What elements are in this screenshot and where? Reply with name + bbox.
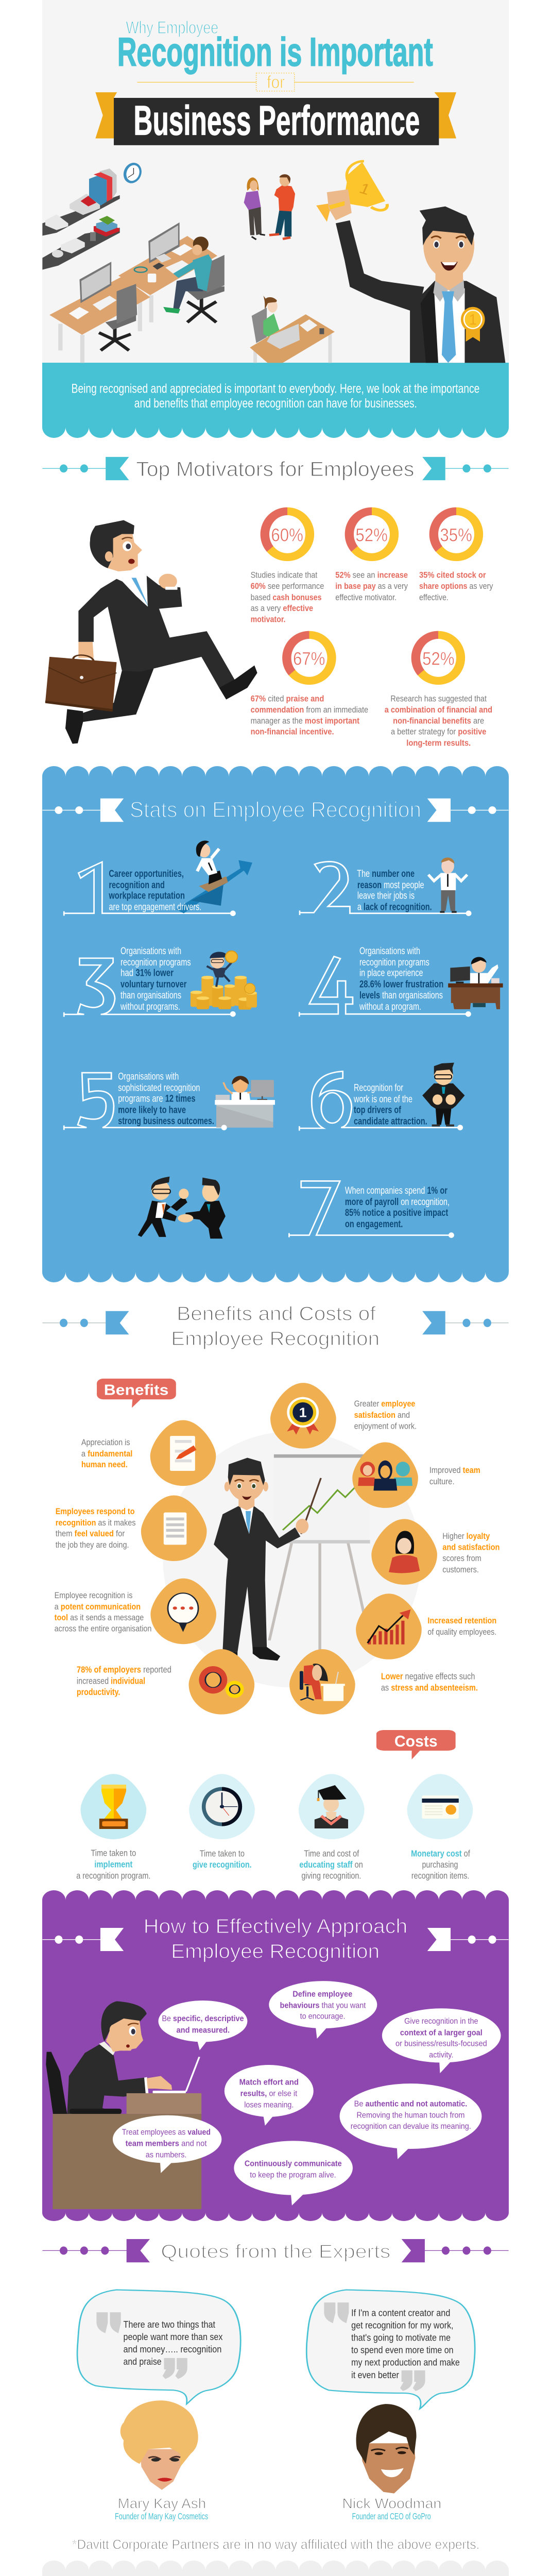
stat 1 <box>64 841 252 916</box>
number 6 <box>299 1071 460 1131</box>
callout: continuously communicate: to keep the program alive. <box>250 2171 336 2180</box>
stat 5 <box>64 1071 275 1130</box>
icon: closing quote <box>400 2370 425 2391</box>
callout: match effort <box>225 2065 314 2126</box>
callout: define behaviours: to encourage. <box>300 2012 346 2021</box>
number 2 <box>300 861 469 915</box>
text 6: candidate attraction. <box>354 1116 427 1127</box>
quote bubble: Mary Kay Ash <box>77 2290 240 2404</box>
callout: treat employees <box>113 2115 221 2173</box>
name: Nick Woodman: Founder and CEO of GoPro <box>352 2512 431 2522</box>
illustration: thumbs-up man <box>422 1063 464 1126</box>
callout: context of larger goal <box>382 2008 501 2073</box>
text: the job they are doing. <box>56 1540 129 1550</box>
text 7: more of payroll on recognition, <box>345 1196 450 1208</box>
quote bubble: Nick Woodman <box>306 2290 475 2409</box>
section: benefits lower and costs: Time taken to <box>200 1849 245 1858</box>
section: how to approach <box>42 1914 509 2209</box>
illustration: standing man <box>269 174 295 239</box>
benefit: productivity <box>77 1649 254 1715</box>
portrait: Nick Woodman <box>356 2404 417 2494</box>
text: Higher loyalty <box>442 1532 490 1541</box>
heading: benefits and costs <box>42 1302 509 1350</box>
heading: stats on employee recognition <box>42 798 509 822</box>
text 2: The number one <box>357 868 415 879</box>
icon: wall clock <box>122 161 144 184</box>
illustration: businessman raising trophy: 1 <box>469 311 477 328</box>
chart: donut 52%: 52% <box>355 525 388 546</box>
text: a fundamental <box>81 1449 132 1459</box>
illustration: running businessman <box>45 520 257 744</box>
quote text: If I'm a content creator and <box>351 2308 450 2318</box>
text: 35% stock options: 35% cited stock or <box>419 570 486 580</box>
benefit: satisfaction <box>270 1383 417 1449</box>
text: 52% research: a better strategy for positive <box>391 726 486 736</box>
quote text: and praise <box>124 2357 162 2367</box>
quote text: to spend even more time on <box>351 2345 454 2355</box>
text: Employees respond to <box>56 1507 134 1516</box>
text 4 <box>359 945 443 1012</box>
name: Nick Woodman: Nick Woodman <box>342 2496 441 2512</box>
panel: header background <box>42 0 509 363</box>
chart: donut 52% research: 52% <box>422 649 455 669</box>
quote text: that's going to motivate me <box>351 2332 451 2343</box>
stat 6 <box>299 1063 464 1131</box>
number 5 <box>64 1073 225 1130</box>
quote text: it even better <box>351 2369 399 2380</box>
title <box>117 18 433 92</box>
callout: match effort: loses meaning. <box>244 2100 294 2109</box>
callout: be specific: and measured. <box>176 2026 230 2035</box>
illustration: man at desk <box>448 957 503 1009</box>
callout: be authentic: recognition can devalue its meaning. <box>351 2122 471 2131</box>
text: Appreciation is <box>81 1438 130 1447</box>
text 7: When companies spend 1% or <box>345 1185 447 1196</box>
intro text <box>72 381 479 410</box>
callout: continuously communicate <box>234 2141 353 2206</box>
text: Employee recognition is <box>55 1591 132 1600</box>
text: 60% bonuses: based cash bonuses <box>251 592 322 602</box>
text 3: than organisations <box>120 990 181 1001</box>
benefit: communication <box>55 1579 216 1644</box>
background circle <box>163 1431 421 1687</box>
illustration: office chair front <box>99 284 137 350</box>
section: quotes and footer <box>42 2239 509 2576</box>
section: benefits lower and costs <box>76 1649 478 1880</box>
chart: donut 52% research <box>411 631 465 685</box>
text 4: recognition programs <box>359 957 429 968</box>
callout: be authentic: Be authentic and not automatic. <box>354 2099 467 2108</box>
illustration: businessman raising trophy <box>336 207 505 363</box>
illustration: standing woman <box>244 177 265 240</box>
icon: closing quote <box>163 2358 187 2379</box>
text 4: in place experience <box>359 968 423 979</box>
icon: medal <box>270 1383 336 1449</box>
text 7: 85% notice a positive impact <box>345 1207 449 1218</box>
text 1: Career opportunities, <box>109 868 184 879</box>
illustration: trophy in hand: 1 <box>357 179 373 198</box>
benefit: lower stress <box>289 1649 478 1715</box>
text <box>55 1591 151 1634</box>
stat 4 <box>299 945 503 1017</box>
illustration: presenter <box>214 1458 321 1660</box>
text: 67% praise: commendation from an immediate <box>251 705 368 715</box>
illustration: woman at laptop desk <box>250 296 335 363</box>
icon: trophy <box>80 1774 146 1839</box>
text: 67% praise: manager as the most important <box>251 716 359 725</box>
text: 52% base pay: effective motivator. <box>335 592 397 602</box>
text 6: top drivers of <box>354 1105 401 1115</box>
text: 60% bonuses: 60% see performance <box>251 581 324 591</box>
text <box>76 1848 150 1880</box>
text: a potent communication <box>55 1602 141 1612</box>
chart: donut 60% <box>261 507 314 561</box>
illustration: person on arrow <box>176 841 252 913</box>
text: productivity. <box>77 1687 120 1697</box>
chart: donut 52% <box>345 507 399 561</box>
heading: benefits and costs: Benefits and Costs of <box>177 1302 376 1325</box>
text: enjoyment of work. <box>354 1421 417 1431</box>
icon: opening quote <box>324 2302 349 2323</box>
text 3: without programs. <box>120 1001 180 1012</box>
callout: match effort: results, or else it <box>240 2089 297 2098</box>
text 1: workplace reputation <box>109 890 185 902</box>
icon: team <box>352 1442 418 1508</box>
text: 67% praise: non-financial incentive. <box>251 726 334 736</box>
number 1 <box>64 862 233 916</box>
text 2: a lack of recognition. <box>357 902 432 913</box>
icon: rising chart <box>356 1594 422 1659</box>
text: 60% bonuses <box>251 570 324 624</box>
text: 52% base pay: in base pay as a very <box>335 581 408 591</box>
text: implement <box>94 1859 132 1869</box>
text 2: leave their jobs is <box>357 890 415 902</box>
text: 52% base pay: 52% see an increase <box>335 570 408 580</box>
stat 3 <box>64 945 257 1017</box>
callout: treat employees: Treat employees as valued <box>122 2128 211 2137</box>
callout: context of larger goal: context of a larger goal <box>400 2028 483 2037</box>
benefit: team culture <box>352 1442 480 1508</box>
callout: costs: Costs <box>394 1732 438 1750</box>
section: header <box>42 18 505 410</box>
text: customers. <box>442 1565 479 1574</box>
quote text: my next production and make <box>351 2357 460 2368</box>
panel: references grey background <box>42 2561 509 2576</box>
text: 35% stock options: share options as very <box>419 581 493 591</box>
text 5: strong business outcomes. <box>118 1115 214 1127</box>
callout: define behaviours <box>269 1981 377 2039</box>
text <box>427 1616 496 1637</box>
illustration: handshake <box>138 1177 226 1239</box>
name: Mary Kay Ash <box>115 2496 208 2522</box>
callout: define behaviours: behaviours that you want <box>280 2001 366 2010</box>
heading: how to effectively approach: Employee Recognition <box>171 1940 380 1962</box>
text <box>381 1671 478 1692</box>
heading: quotes from the experts: Quotes from the Experts <box>161 2241 390 2262</box>
text: 67% praise <box>251 693 368 736</box>
text: 52% research: non-financial benefits are <box>393 716 484 725</box>
quote text: and money….. recognition <box>124 2344 221 2354</box>
illustration: shrugging man <box>428 858 467 912</box>
section: stats <box>42 798 509 1239</box>
illustration: flip chart <box>269 1454 370 1650</box>
chart: donut 35%: 35% <box>440 525 472 546</box>
text: 52% research: long-term results. <box>406 738 471 748</box>
text: increased individual <box>77 1676 145 1686</box>
stat 2 <box>300 858 472 916</box>
icon: opening quote <box>96 2312 121 2333</box>
shelves with binders and books <box>42 168 120 269</box>
text: tool as it sends a message <box>55 1613 144 1622</box>
quote text <box>124 2319 223 2367</box>
text 1: recognition and <box>109 879 165 891</box>
text: of quality employees. <box>427 1628 496 1637</box>
heading: stats on employee recognition: Stats on Employee Recognition <box>130 798 421 822</box>
chart: donut 60%: 60% <box>271 525 303 546</box>
text: purchasing <box>422 1860 458 1870</box>
illustration: happy worker at grey desk <box>215 1076 275 1128</box>
section: benefits lower and costs: Monetary cost of <box>411 1849 470 1858</box>
text 5: Organisations with <box>118 1071 179 1082</box>
text <box>77 1665 171 1697</box>
illustration: coins and man <box>191 951 257 1010</box>
text: 60% bonuses: as a very effective <box>251 603 313 613</box>
text: Improved team <box>429 1466 480 1475</box>
callout: context of larger goal: or business/results-focused <box>395 2039 487 2048</box>
callout: context of larger goal: Give recognition in the <box>404 2016 478 2026</box>
portrait: Mary Kay Ash <box>120 2400 198 2490</box>
text 2 <box>357 868 432 913</box>
name: Mary Kay Ash: Mary Kay Ash <box>118 2496 206 2512</box>
benefit: loyalty <box>371 1519 500 1585</box>
text <box>354 1399 417 1431</box>
text 4: levels than organisations <box>359 990 443 1001</box>
text 5 <box>118 1071 214 1127</box>
name: Nick Woodman <box>342 2496 441 2522</box>
text: human need. <box>81 1460 128 1469</box>
text 1: are top engagement drivers. <box>109 902 201 913</box>
text: 52% base pay <box>335 570 408 602</box>
title: Why Employee <box>126 18 218 38</box>
text 5: more likely to have <box>118 1105 186 1115</box>
icon: gears <box>188 1649 254 1715</box>
callout: treat employees: as numbers. <box>146 2150 186 2159</box>
text 7: on engagement. <box>345 1218 403 1230</box>
callout: benefits <box>97 1379 176 1408</box>
title: for <box>267 73 285 92</box>
text: culture. <box>429 1477 455 1486</box>
text: 60% bonuses: Studies indicate that <box>251 570 318 580</box>
text: recognition as it makes <box>56 1518 136 1528</box>
cost: educating staff <box>299 1774 365 1880</box>
text <box>299 1849 363 1880</box>
text 2: reason most people <box>357 879 424 891</box>
illustration: man at laptop and desk <box>46 2001 201 2209</box>
benefit: retention <box>356 1594 496 1659</box>
text 3: voluntary turnover <box>120 979 187 990</box>
icon: customer <box>371 1519 437 1585</box>
text 6: Recognition for <box>354 1082 403 1094</box>
panel: approach purple background <box>42 1890 509 2221</box>
heading: quotes from the experts <box>42 2239 509 2262</box>
icon: notepad <box>141 1495 206 1561</box>
text 6: work is one of the <box>353 1094 412 1105</box>
text <box>193 1849 252 1870</box>
panel: stats blue background <box>42 766 509 1282</box>
text 4: Organisations with <box>359 945 420 957</box>
cost: implement <box>76 1774 150 1880</box>
chart: donut 35% <box>429 507 483 561</box>
heading: how to effectively approach: How to Effectively Approach <box>144 1914 407 1937</box>
section: benefits lower and costs: educating staff on <box>299 1860 363 1870</box>
number 3 <box>64 958 233 1017</box>
text: 35% stock options: effective. <box>419 592 449 602</box>
text: 78% of employers reported <box>77 1665 171 1674</box>
text <box>81 1438 132 1469</box>
name: Mary Kay Ash: Founder of Mary Kay Cosmetics <box>115 2512 208 2522</box>
text 3: recognition programs <box>120 957 191 968</box>
chart: donut 67%: 67% <box>293 649 325 669</box>
chart: donut 67% <box>282 631 336 685</box>
icon: clock <box>189 1774 255 1839</box>
cost: time <box>189 1774 255 1870</box>
text 6 <box>353 1082 427 1127</box>
text: Increased retention <box>427 1616 496 1625</box>
heading: how to effectively approach <box>42 1914 509 1962</box>
text: them feel valued for <box>56 1529 125 1538</box>
callout: continuously communicate: Continuously communicate <box>245 2159 342 2168</box>
callout: treat employees: team members and not <box>126 2139 207 2148</box>
text: 52% research <box>385 693 492 748</box>
text <box>429 1466 480 1486</box>
illustration: trophy in hand <box>316 161 387 222</box>
section: benefits lower and costs: a recognition program. <box>76 1871 150 1880</box>
icon: speech bubble <box>150 1579 216 1644</box>
callout: be specific: Be specific, descriptive <box>162 2014 244 2023</box>
text: 60% bonuses: motivator. <box>251 614 286 624</box>
callout: costs <box>376 1730 456 1759</box>
section: benefits lower and costs: Time and cost of <box>304 1849 359 1858</box>
icon: document with pencil <box>150 1420 216 1486</box>
callout: be specific <box>158 2001 247 2050</box>
text: scores from <box>442 1554 481 1563</box>
cost: monetary <box>407 1774 473 1880</box>
icon: stressed worker at desk <box>289 1649 355 1715</box>
text <box>411 1849 470 1880</box>
text 5: sophisticated recognition <box>118 1082 200 1094</box>
quote text: get recognition for my work, <box>351 2320 454 2331</box>
text 4: without a program. <box>359 1001 421 1012</box>
text: across the entire organisation <box>55 1624 151 1634</box>
callout: match effort: Match effort and <box>239 2078 299 2087</box>
icon: graduate <box>299 1774 365 1839</box>
callout: be authentic <box>340 2083 481 2159</box>
text 3: had 31% lower <box>120 968 174 979</box>
text 5: programs are 12 times <box>118 1093 196 1104</box>
illustration: office desks <box>49 223 217 363</box>
text 4: 28.6% lower frustration <box>359 979 443 990</box>
text: and satisfaction <box>442 1543 500 1552</box>
text <box>56 1507 136 1550</box>
callout: benefits: Benefits <box>104 1382 168 1398</box>
benefit: feel valued <box>56 1495 206 1561</box>
quote text <box>351 2308 460 2380</box>
text: satisfaction and <box>354 1411 410 1420</box>
section: benefits lower and costs: give recognition. <box>193 1860 252 1870</box>
quote text: people want more than sex <box>124 2332 223 2342</box>
text: 67% praise: 67% cited praise and <box>251 693 324 703</box>
text 3: Organisations with <box>120 945 181 957</box>
quote text: There are two things that <box>124 2319 215 2330</box>
text <box>442 1532 500 1574</box>
text 7 <box>345 1185 450 1230</box>
text: 35% stock options <box>419 570 493 602</box>
text 1 <box>109 868 201 913</box>
number 7 <box>289 1181 451 1238</box>
callout: define behaviours: Define employee <box>292 1990 352 1998</box>
section: benefits lower and costs: giving recognition. <box>301 1871 361 1880</box>
callout: context of larger goal: activity. <box>429 2050 454 2060</box>
text 3 <box>120 945 191 1012</box>
section: top motivators <box>42 457 509 748</box>
number 4 <box>299 956 468 1016</box>
illustration: seated worker <box>163 236 225 323</box>
benefit: human need <box>81 1420 216 1486</box>
icon: credit card <box>407 1774 473 1839</box>
ribbon banner <box>95 92 456 145</box>
section: benefits and costs <box>42 1302 509 1687</box>
heading: benefits and costs: Employee Recognition <box>171 1328 380 1350</box>
text: Greater employee <box>354 1399 415 1409</box>
stat 7 <box>289 1181 454 1238</box>
panel: teal intro band <box>42 363 509 438</box>
callout: be authentic: Removing the human touch from <box>356 2111 464 2120</box>
text: Time taken to <box>91 1848 136 1858</box>
icon: medal: 1 <box>299 1405 307 1420</box>
